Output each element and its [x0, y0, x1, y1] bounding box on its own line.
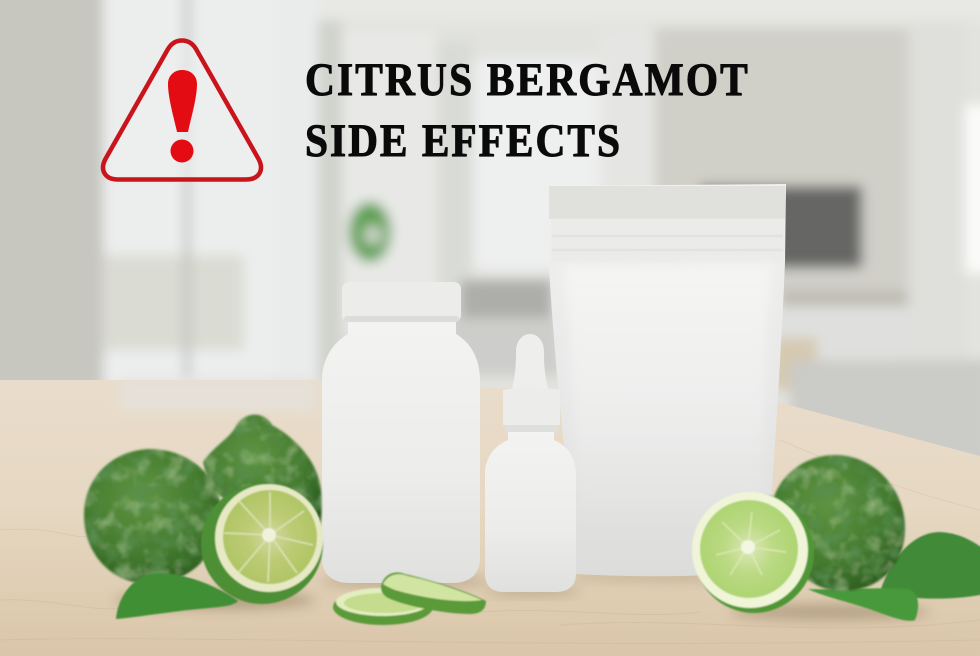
cut bergamot left [201, 484, 323, 604]
lime slices centre [333, 573, 486, 625]
bergamot fruits left group [84, 415, 323, 619]
back bergamot [203, 415, 322, 530]
table top [0, 380, 980, 656]
right lower leaf [808, 588, 918, 621]
cut bergamot right [692, 492, 814, 613]
right leaf [880, 532, 980, 599]
right bergamot [773, 455, 905, 591]
table wood grain and reflection [0, 378, 980, 643]
front bergamot [84, 449, 221, 584]
bergamot fruits right group [692, 455, 980, 621]
title: SIDE EFFECTS [305, 115, 620, 167]
warning icon [103, 40, 261, 180]
jar [320, 282, 490, 587]
title: CITRUS BERGAMOT [305, 54, 748, 106]
title [305, 54, 748, 167]
pouch [548, 184, 786, 582]
dropper bottle [485, 334, 581, 595]
left leaf [116, 573, 238, 619]
background: blurred room interior [0, 0, 980, 470]
